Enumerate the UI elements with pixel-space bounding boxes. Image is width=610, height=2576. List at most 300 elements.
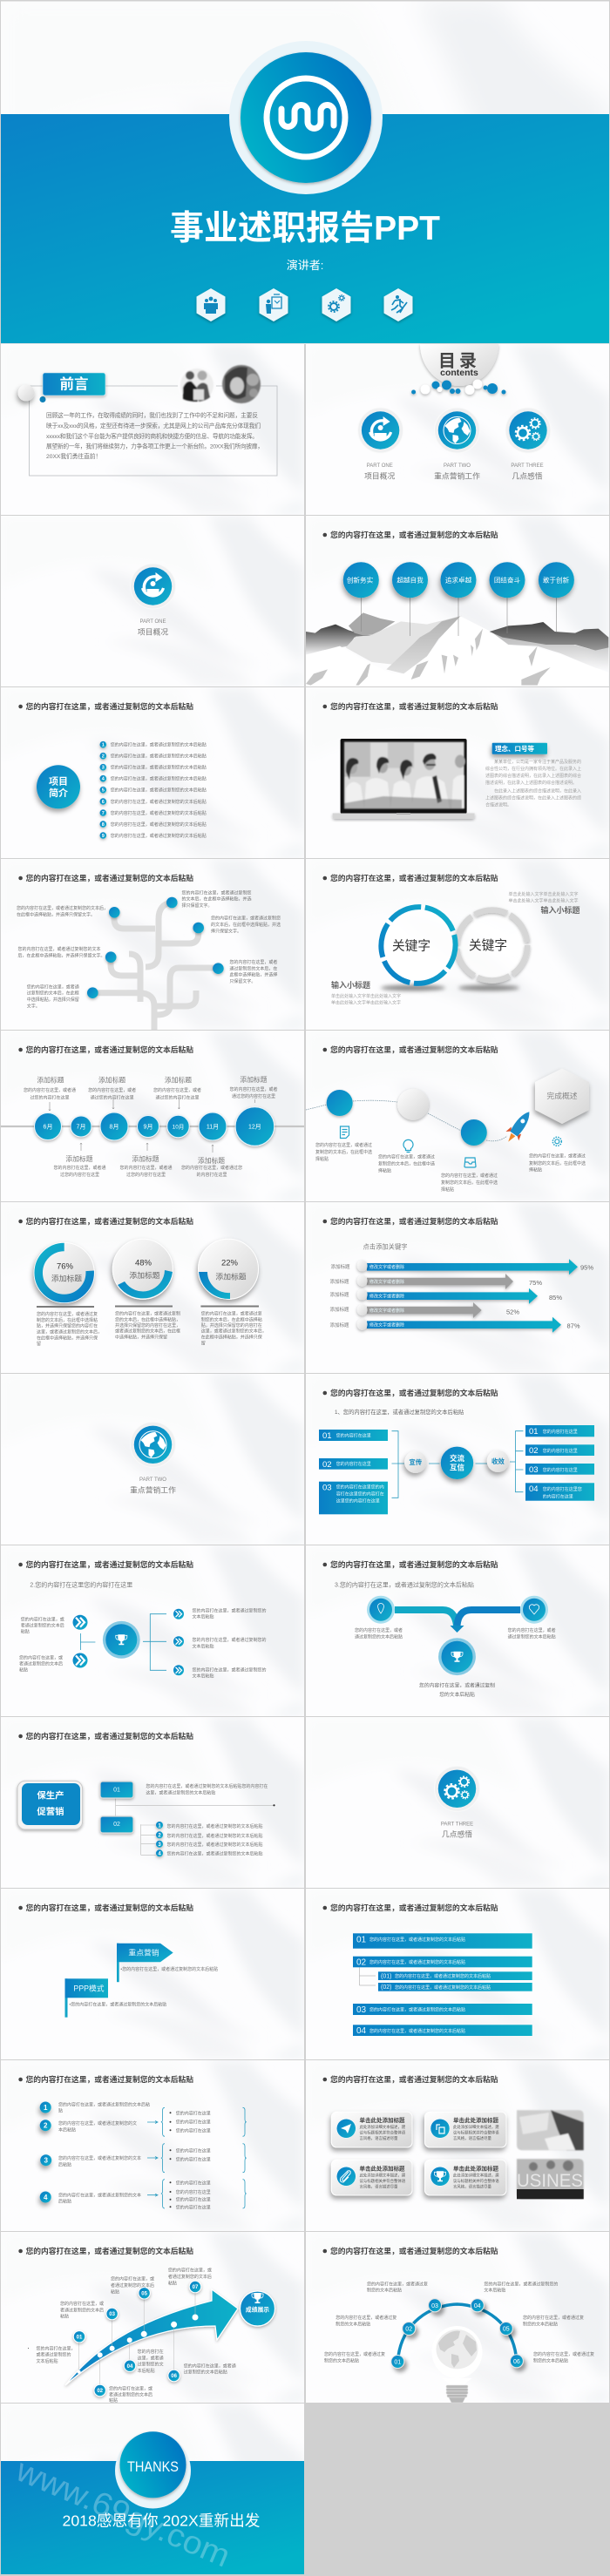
arrow bar chart (329, 1259, 593, 1333)
panel: arrow bars slide (306, 1202, 609, 1373)
card 1: 言风格，语言描述尽量 (359, 2135, 398, 2141)
laptop description text: 描述说明，在此录入上述图表的综合描述说明。 (485, 780, 577, 786)
ring 48%: 48% (135, 1258, 152, 1268)
section label: PART TWO (139, 1477, 166, 1483)
left chevrons (73, 1615, 87, 1667)
stage captions: 择粘贴 (441, 1187, 454, 1193)
arrow bar chart: 75% (529, 1279, 542, 1287)
timeline lower labels: 您的内容打在这里，或者通过您 (181, 1165, 242, 1171)
card 4: 单击此处添加标题 (453, 2164, 498, 2173)
keyword circles: 追求卓越 (445, 575, 472, 584)
captions (19, 1607, 267, 1679)
box 02 (100, 1816, 133, 1833)
right boxes: 您的内容打在这里 (543, 1467, 578, 1473)
panel: timeline slide (1, 1031, 304, 1201)
heading: 您的内容打在这里，或者通过复制您的文本后粘贴 (330, 530, 498, 539)
timeline upper labels: 添加标题 (240, 1075, 268, 1084)
timeline lower labels: 添加标题 (65, 1154, 93, 1163)
marker captions: 或者通过复制您的 (37, 2352, 71, 2358)
icon: part three (434, 1766, 479, 1811)
icon: part two (434, 408, 479, 453)
box 02 sublist: 3 (158, 1842, 161, 1848)
section label: 项目概况 (138, 627, 168, 636)
month nodes: 8月 (110, 1124, 119, 1131)
main box (17, 1781, 83, 1829)
node captions: 贴 (58, 2108, 63, 2114)
preface body text: 映于xx及xxx的风格，定型还有待进一步探索，尤其是网上的公司产品库充分体现我们 (46, 422, 261, 429)
connectors (392, 1431, 523, 1498)
arc (397, 2304, 517, 2362)
central trophy circle (103, 1621, 140, 1659)
ring captions: 在此框中选择粘贴，并选择只保 (201, 1335, 262, 1341)
upper right caption (509, 891, 580, 915)
marker captions: 者通过复制您的文本后 (60, 2307, 104, 2313)
heading: 您的内容打在这里，或者通过复制您的文本后粘贴 (330, 873, 498, 882)
left boxes: 03 (322, 1483, 332, 1493)
captions: 您的内容打在这里，或者通过复制您的 (192, 1607, 267, 1613)
arc captions: 制您的文本后粘贴 (533, 2357, 568, 2363)
merging arrow (395, 1610, 520, 1633)
stage captions: 择粘贴 (315, 1156, 329, 1162)
results circle: 成绩展示 (246, 2305, 269, 2314)
heading: 您的内容打在这里，或者通过复制您的文本后粘贴 (26, 2074, 193, 2084)
flag: key marketing: •您的内容打在这里，或者通过复制您的文本后粘贴 (120, 1966, 218, 1972)
laptop description text: 上述图表的综合描述说明，在此录入上述图表的综 (485, 794, 581, 801)
numbered markers (73, 2281, 201, 2397)
box 02 sublist: 2 (158, 1834, 161, 1839)
ring captions: 中选择粘贴，并选择只保留 (115, 1335, 167, 1341)
timeline lower labels: 您的内容打在这里，或者通 (53, 1165, 106, 1171)
connector lines (116, 1798, 274, 1855)
stage captions: 择粘贴 (529, 1167, 542, 1173)
panel: mountains slide (306, 516, 609, 686)
panel: keyword rings slide (306, 859, 609, 1030)
section label (138, 619, 168, 636)
branch nodes (87, 897, 224, 998)
bar text: 您的内容打在这里，或者通过复制您的文本后粘贴 (369, 2007, 465, 2013)
numbered list: 您的内容打在这里，或者通过复制您的文本后粘贴 (111, 788, 207, 793)
heading: 您的内容打在这里，或者通过复制您的文本后粘贴 (330, 2074, 498, 2084)
heading: 您的内容打在这里，或者通过复制您的文本后粘贴 (26, 1903, 193, 1912)
card 1: 单击此处添加标题 (359, 2116, 405, 2124)
arrow bar chart: 添加标题 (329, 1291, 349, 1298)
numbered list: 您的内容打在这里，或者通过复制您的文本后粘贴 (111, 821, 207, 828)
dotted path (306, 1100, 507, 1141)
arc markers: 01 (394, 2359, 401, 2366)
contents disc: contents (440, 368, 478, 378)
divider bars (37, 1305, 259, 1308)
timeline lower labels: 过您的内容打在这里 (126, 1172, 166, 1178)
left boxes: 您的内容打在这里 (336, 1432, 371, 1439)
panel: braces slide (1, 2060, 304, 2231)
bullet items: 您的内容打在这里 (176, 2148, 211, 2153)
thanks blue band (1, 2461, 304, 2574)
flow circles: 交流 (450, 1454, 464, 1463)
contents disc: 目录 (438, 351, 480, 371)
captions: 您的内容打在这里，或者通过复制您的 (192, 1637, 267, 1643)
blue ring (373, 898, 464, 992)
arrow bar chart: 修改文字或者删除 (369, 1308, 404, 1314)
completion hexagon (535, 1068, 589, 1124)
marker captions: 过复制您的文本后粘贴 (184, 2370, 227, 2376)
arrow bar chart: 修改文字或者删除 (369, 1264, 404, 1270)
captions: 文本后粘贴 (192, 1643, 214, 1649)
numbered list: 2 (102, 754, 105, 760)
card 2: 单击此处添加标题 (453, 2116, 498, 2124)
section labels: PART THREE (511, 463, 544, 469)
timeline upper labels: 添加标题 (165, 1075, 192, 1084)
bar text: 您的内容打在这里，或者通过复制您的文本后粘贴 (369, 1959, 465, 1965)
preface body text: xxxxx和我们这个平台能为客户提供良好的商机和快捷方便的信息、导航的功能发挥。 (46, 432, 258, 440)
ring captions: 您的内容打在这里，或者通过复制 (115, 1310, 180, 1317)
flag: PPP (64, 1978, 166, 2018)
left boxes: 02 (322, 1460, 332, 1470)
marker captions: 粘贴 (168, 2280, 177, 2286)
heading: 您的内容打在这里，或者通过复制您的文本后粘贴 (26, 701, 193, 711)
arrow nodes (367, 1596, 548, 1675)
numbered list: 8 (102, 822, 105, 828)
completion hexagon: 完成概述 (546, 1091, 578, 1100)
box 01 (100, 1782, 133, 1798)
panel: nested bars slide (306, 1889, 609, 2059)
left boxes: 您的内容打在这里您的内 (336, 1484, 384, 1491)
branch captions: 择只保留文字。 (181, 903, 213, 909)
lower left caption: 输入小标题 (331, 980, 370, 990)
stage icons (340, 1126, 561, 1167)
ring captions (37, 1310, 267, 1347)
subheading: 1、您的内容打在这里，或者通过复制您的文本后粘贴 (335, 1408, 464, 1416)
heading: 您的内容打在这里，或者通过复制您的文本后粘贴 (330, 1045, 498, 1054)
right boxes: 01 (529, 1427, 539, 1437)
bar text (369, 1937, 491, 2034)
section label (441, 1822, 473, 1838)
numbered nodes: 1 (44, 2104, 48, 2112)
bullet items: 您的内容打在这里 (176, 2189, 211, 2195)
stage captions: 您的内容打在这里，或者通过 (529, 1153, 586, 1160)
marker captions: 者通过复制您的文本后 (111, 2282, 154, 2289)
bullet items: 您的内容打在这里 (176, 2180, 211, 2187)
timeline upper labels: 过您的内容打在这里 (30, 1094, 70, 1101)
lower left caption: 单击此处输入文字单击此处输入文字 (331, 993, 401, 999)
arc captions: 您的内容打在这里，或者通过复 (367, 2281, 428, 2287)
arrow bar chart: 87% (566, 1322, 580, 1329)
grey tree branches (92, 903, 218, 1030)
ring captions: 或者通过复制您的文本后，在此框 (115, 1329, 180, 1335)
section labels (364, 463, 544, 481)
panel: flags slide (1, 1889, 304, 2059)
arrow bar chart: 添加标题 (329, 1306, 349, 1313)
section labels: 几点感悟 (512, 470, 543, 481)
arc markers: 06 (513, 2359, 520, 2365)
panel: part one divider (1, 516, 304, 686)
intro circle: 简介 (49, 787, 68, 799)
captions: 您的内容打在这里，或者通过复制您的 (192, 1667, 267, 1673)
captions: 粘贴 (19, 1667, 28, 1673)
flag: PPP: •您的内容打在这里，或者通过复制您的文本后粘贴 (70, 2002, 166, 2008)
laptop with photo (333, 739, 475, 819)
branch captions: 文字。 (27, 1003, 40, 1009)
card 2: 议与标题相关并符合整体语 (453, 2129, 499, 2136)
icon: part one (358, 408, 403, 453)
card 2: 此处添加详细文本描述，建 (453, 2124, 499, 2130)
box 02 sublist: 您的内容打在这里，或者通过复制您的文本后粘贴 (167, 1842, 263, 1848)
arc markers: 05 (503, 2326, 510, 2333)
arc captions: 您的内容打在这里，或者通过复 (336, 2315, 396, 2321)
numbered list (99, 741, 207, 839)
marker captions: 您的内容打在这里，或 (111, 2276, 154, 2282)
branch captions: 您的内容打在这里，或者通过复制您 (181, 889, 252, 896)
card 1: 此处添加详细文本描述，建 (359, 2124, 406, 2130)
laptop description text: 述图表的综合描述说明，在此录入上述图表的综合 (485, 773, 581, 779)
ring captions: 留 (37, 1341, 41, 1347)
laptop description text: 合描述说明。 (485, 801, 512, 808)
keyword circles (343, 562, 574, 636)
panel: laptop slide (306, 687, 609, 858)
heading: 您的内容打在这里，或者通过复制您的文本后粘贴 (26, 1045, 193, 1054)
numbered markers: 01 (77, 2335, 83, 2340)
arrow dots (78, 2314, 198, 2374)
captions: 文本后粘贴 (192, 1673, 214, 1679)
captions: 粘贴 (21, 1629, 30, 1635)
box 01 caption: 您的内容打在这里，或者通过复制您的文本后粘贴您的内容打在 (146, 1783, 268, 1789)
card 4: 言风格，语言描述尽量 (453, 2183, 492, 2190)
main title: 事业述职报告PPT (170, 210, 440, 247)
bullet items: 您的内容打在这里 (176, 2120, 211, 2126)
arrow bar chart: 52% (506, 1308, 519, 1315)
blue dot (40, 396, 45, 402)
panel: light bulb arc slide (306, 2232, 609, 2403)
stage captions: 您的内容打在这里，或者通过 (441, 1173, 498, 1179)
node captions: 本后粘贴 (58, 2126, 76, 2133)
arc captions: 制您的文本后粘贴 (523, 2321, 558, 2327)
laptop description text: 某某单位，公司是一家专注于某产品及服务的 (494, 759, 581, 765)
slogan tag: 理念、口号等 (495, 744, 534, 753)
ring floor shadows (381, 984, 519, 991)
numbered markers: 02 (97, 2389, 104, 2394)
preface body text: 20XX我们勇往直前！ (46, 452, 101, 460)
heading: 您的内容打在这里，或者通过复制您的文本后粘贴 (26, 2246, 193, 2255)
left boxes: 容打在这里您的内容打在 (336, 1491, 384, 1498)
marker captions: 您的内容打在这里，或者通 (184, 2363, 236, 2369)
panel: contents slide (306, 344, 609, 515)
arc captions: 制您的文本后粘贴 (336, 2321, 370, 2327)
flow circles: 互信 (450, 1464, 464, 1472)
card 3: 议与标题相关并符合整体语 (359, 2178, 406, 2184)
numbered markers: 06 (171, 2374, 178, 2379)
arc captions: 文本后粘贴 (484, 2288, 505, 2294)
heading: 您的内容打在这里，或者通过复制您的文本后粘贴 (330, 1559, 498, 1569)
photo: couple (178, 366, 216, 404)
numbered markers: 04 (127, 2364, 133, 2370)
decorative bubbles (411, 380, 505, 395)
card 3: 此处添加详细文本描述，建 (359, 2173, 406, 2178)
ring 76%: 76% (57, 1261, 74, 1272)
month nodes: 12月 (248, 1124, 261, 1131)
panel: chevron fan slide (1, 1545, 304, 1716)
timeline upper labels: 通过您的内容打在这里 (232, 1093, 275, 1099)
right boxes: 您的内容打在这里 (543, 1448, 578, 1454)
arc markers: 04 (474, 2303, 481, 2309)
ring 22% (199, 1239, 258, 1299)
panel: tree diagram slide (1, 859, 304, 1030)
timeline lower labels: 的内容打在这里 (196, 1172, 227, 1178)
flag: key marketing: 重点营销 (128, 1948, 159, 1957)
numbered list: 您的内容打在这里，或者通过复制您的文本后粘贴 (111, 810, 207, 816)
numbered nodes: 3 (44, 2157, 48, 2164)
branch captions: 只保留文字。 (229, 978, 255, 984)
grey ring: 关键字 (469, 938, 507, 953)
preface frame (30, 386, 277, 476)
marker captions: 粘贴 (109, 2397, 118, 2404)
preface body text: 展望新的一年，我们将继续努力，力争各项工作更上一个新台阶。20XX我们所向披靡， (46, 443, 263, 450)
upper right caption: 输入小标题 (540, 905, 580, 915)
marker captions: 者通过复制您的文本后 (168, 2274, 212, 2280)
closing message: 2018感恩有你 202X重新出发 (63, 2512, 261, 2530)
branch captions: 此框中选择粘贴，并选择 (229, 972, 277, 978)
timeline upper labels: 添加标题 (37, 1075, 64, 1084)
bar numbers: (01) (381, 1974, 391, 1979)
timeline lower labels: 过您的内容打在这里 (60, 1172, 99, 1178)
connector (359, 1967, 376, 1985)
icon: part one (131, 564, 176, 609)
heading: 您的内容打在这里，或者通过复制您的文本后粘贴 (26, 873, 193, 882)
numbered nodes: 4 (44, 2194, 48, 2201)
heading: 您的内容打在这里，或者通过复制您的文本后粘贴 (330, 1216, 498, 1226)
captions: 您的内容打在这里，或者通过复制 (419, 1681, 495, 1688)
bar text: 您的内容打在这里，或者通过复制您的文本后粘贴 (395, 1973, 491, 1979)
icon: gear (552, 1137, 561, 1146)
ring captions: 您的内容打在这里，或者通过复 (201, 1310, 262, 1317)
timeline axis (1, 1126, 304, 1127)
numbered markers: 03 (109, 2312, 116, 2317)
month nodes: 7月 (77, 1124, 85, 1131)
branch captions: 您的内容打在这里，或者 (229, 959, 277, 965)
branch captions: 后，在此框中选择粘贴，并选择只保留文字。 (17, 953, 105, 959)
timeline upper labels: 添加标题 (98, 1075, 125, 1084)
card 2: 言风格，语言描述尽量 (453, 2135, 492, 2141)
upper right caption: 单击此处输入文字单击此处输入文字 (509, 897, 579, 903)
branch captions: 中选择粘贴，并选择只保留 (27, 997, 79, 1003)
node captions: 您的内容打在这里，或者通过复制您的文本 (58, 2193, 141, 2199)
arrow bar chart: 添加标题 (329, 1278, 349, 1285)
bars (353, 1933, 532, 2036)
ring captions: 留 (201, 1340, 206, 1347)
node captions (58, 2102, 150, 2205)
icon: document (340, 1126, 349, 1138)
heading: 您的内容打在这里，或者通过复制您的文本后粘贴 (330, 1903, 498, 1912)
card 4: 此处添加详细文本描述，建 (453, 2173, 499, 2178)
bullet items: 您的内容打在这里 (176, 2204, 211, 2210)
card 1 (331, 2112, 412, 2147)
ring 76%: 添加标题 (51, 1274, 82, 1282)
section labels: PART ONE (367, 463, 393, 469)
captions: 您的内容打在这里，或 (19, 1654, 63, 1660)
branch captions: 您的内容打在这里，或者通过复制您 (211, 915, 281, 921)
section labels: 项目概况 (364, 470, 395, 481)
marker captions: 者通过复制您的文本后 (109, 2392, 152, 2398)
arc captions (324, 2281, 594, 2363)
numbered list: 您的内容打在这里，或者通过复制您的文本后粘贴 (111, 833, 207, 839)
arc captions: 您的内容打在这里，或者通过复制您的 (484, 2281, 558, 2287)
captions (355, 1627, 556, 1698)
intro circle: 项目 (49, 775, 68, 788)
captions: 您的内容打在这里，或者 (508, 1627, 556, 1633)
bar numbers: 01 (356, 1936, 367, 1944)
card 3 (331, 2160, 412, 2195)
arrow bar chart: 95% (580, 1263, 593, 1272)
marker captions: 粘贴 (111, 2289, 119, 2295)
ring captions: 这里，或者通过复制您的文本后， (201, 1329, 267, 1335)
card 3: 言风格，语言描述尽量 (359, 2183, 398, 2190)
timeline upper labels: 您的内容打在这里，或者 (153, 1087, 201, 1093)
panel: part three divider (306, 1717, 609, 1888)
flow circles: 宣传 (409, 1458, 423, 1466)
main box: 保生产 (37, 1789, 64, 1802)
marker captions (28, 2268, 236, 2404)
section label (130, 1477, 176, 1495)
arrow bar chart: 修改文字或者删除 (369, 1322, 404, 1328)
captions: 您的内容打在这里，或 (21, 1616, 64, 1622)
stage nodes (327, 1089, 487, 1146)
intro circle (37, 765, 80, 808)
photo: business sign (517, 2159, 584, 2199)
stage captions: 复制您的文本后，在此框中选 (529, 1160, 586, 1166)
timeline upper labels: 通过您的内容打在这里 (91, 1094, 134, 1101)
box 02 sublist: 您的内容打在这里，或者通过复制您的文本后粘贴 (167, 1833, 263, 1839)
panel: production sales slide (1, 1717, 304, 1888)
card 4: 议与标题相关并符合整体语 (453, 2178, 499, 2184)
numbered markers: 07 (193, 2285, 199, 2290)
icon: part two (131, 1422, 176, 1467)
card 1: 议与标题相关并符合整体语 (359, 2129, 406, 2136)
numbered markers: 05 (141, 2291, 148, 2296)
bar numbers: 02 (356, 1958, 367, 1967)
bar numbers: 04 (356, 2026, 367, 2036)
ring captions: 在此框中选择粘贴，并选择只保 (37, 1335, 98, 1341)
numbered list: 您的内容打在这里，或者通过复制您的文本后粘贴 (111, 775, 207, 782)
left boxes: 您的内容打在这里 (336, 1461, 371, 1467)
numbered list: 您的内容打在这里，或者通过复制您的文本后粘贴 (111, 799, 207, 805)
ring 48%: 添加标题 (129, 1270, 160, 1280)
card 2 (425, 2112, 506, 2147)
branch captions: 您的内容打在这里，或者通 (27, 984, 79, 990)
branch captions: 过复制您的文本后，在此框 (27, 991, 79, 997)
ring captions: 制您的文本后，在此框中选择粘 (201, 1316, 262, 1322)
marker captions: 粘贴 (60, 2314, 69, 2320)
box 02 sublist: 4 (158, 1852, 161, 1857)
bullet items: 您的内容打在这里 (176, 2197, 211, 2203)
heading: 您的内容打在这里，或者通过复制您的文本后粘贴 (26, 1731, 193, 1741)
flag: key marketing (117, 1944, 218, 1982)
captions: 者通过复制您的文本后 (21, 1622, 64, 1628)
heading: 您的内容打在这里，或者通过复制您的文本后粘贴 (330, 1388, 498, 1397)
stage captions: 您的内容打在这里，或者通过 (315, 1142, 372, 1148)
left boxes: 这里您的内容打在这里 (336, 1498, 380, 1504)
flow circles: 收效 (491, 1457, 505, 1465)
branch captions (17, 889, 281, 1009)
stage captions: 复制您的文本后，在此框中选 (315, 1149, 372, 1155)
preface body text: 回顾这一年的工作，在取得成绩的同时，我们也找到了工作中的不足和问题，主要反 (46, 411, 258, 419)
grey ring (457, 909, 527, 981)
keyword circles: 超越自我 (396, 575, 424, 584)
numbered list: 9 (102, 834, 105, 839)
ring captions: 您的文本后，在此框中选择粘贴， (115, 1316, 180, 1322)
keyword circles: 团结奋斗 (494, 575, 521, 584)
month nodes: 10月 (173, 1124, 184, 1131)
icon: part three (505, 408, 551, 453)
icon: bulb (403, 1139, 413, 1152)
main box: 促营销 (37, 1806, 64, 1817)
